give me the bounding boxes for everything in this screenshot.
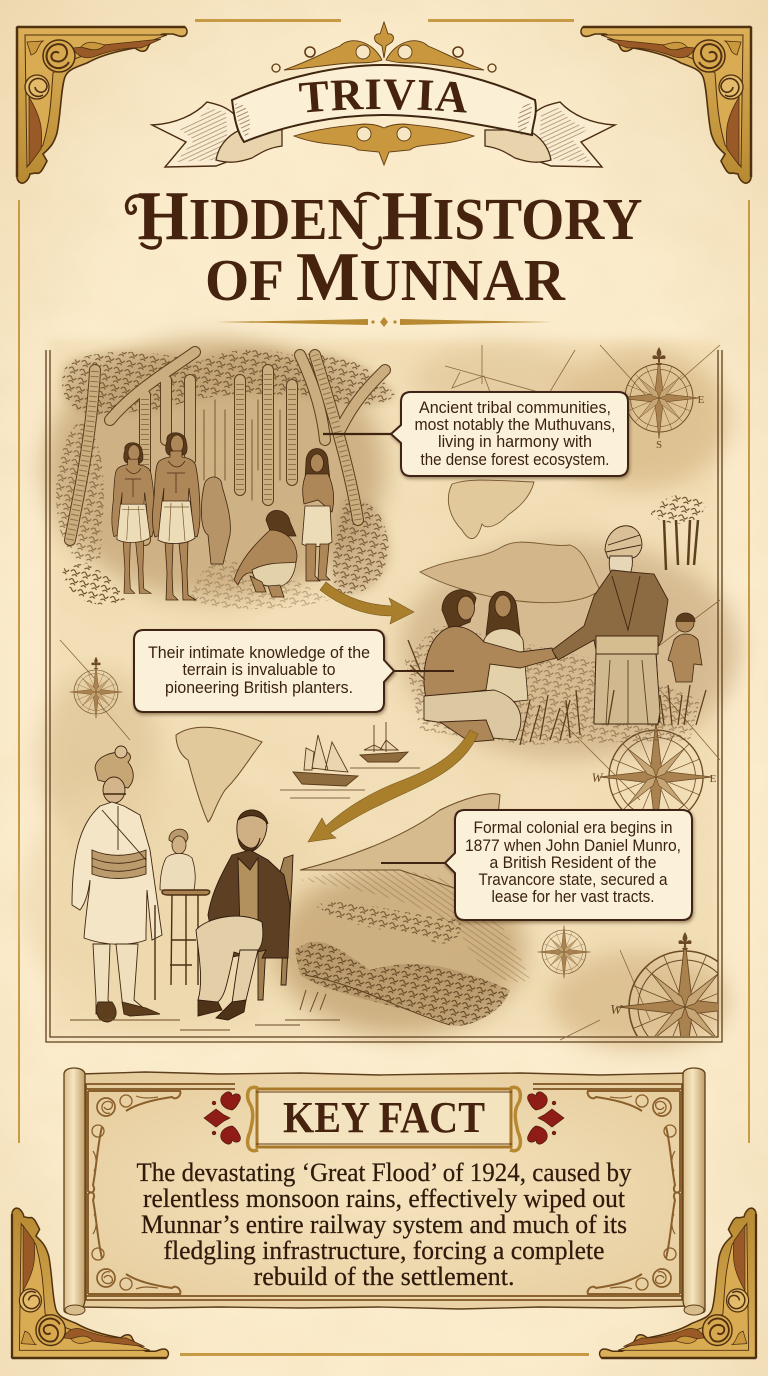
map of india bbox=[176, 727, 262, 822]
forest tree trunks bbox=[70, 352, 385, 540]
map lines bbox=[60, 345, 720, 1040]
side table bbox=[155, 890, 210, 1000]
title divider bbox=[216, 317, 552, 327]
corner ornament: top right bbox=[581, 27, 751, 183]
hooded figure bbox=[201, 477, 230, 564]
right scroll roll bbox=[683, 1068, 705, 1315]
map of north america bbox=[448, 480, 534, 539]
hills and forest backdrop bbox=[405, 495, 706, 745]
callout: terrain knowledge: terrain is invaluable to bbox=[182, 660, 336, 679]
ornament above ribbon bbox=[272, 22, 496, 72]
arrow: forest to handshake bbox=[320, 582, 414, 624]
callout: tribal communities: Ancient tribal communities, bbox=[419, 398, 611, 417]
tribal man centre bbox=[153, 433, 200, 600]
key fact body text: relentless monsoon rains, effectively wiped out bbox=[143, 1183, 626, 1213]
compass large south east bbox=[611, 932, 718, 1036]
tribal man left bbox=[112, 443, 155, 593]
sailing ships bbox=[280, 722, 420, 798]
compass west bbox=[70, 657, 122, 718]
panel frame bbox=[46, 350, 722, 1042]
foreground grass bbox=[408, 640, 706, 745]
forest foliage bbox=[56, 350, 395, 609]
crouching figure bbox=[234, 510, 297, 597]
compass north east: E bbox=[698, 394, 705, 406]
callout: colonial era: Formal colonial era begins in bbox=[474, 818, 672, 837]
compass east: E bbox=[710, 773, 717, 785]
title line two: OF MUNNAR bbox=[205, 239, 566, 316]
hillside landscape bbox=[295, 794, 530, 1026]
callout: colonial era: a British Resident of the bbox=[490, 853, 656, 872]
standing woman bbox=[302, 448, 334, 581]
key fact body text: Munnar’s entire railway system and much of its bbox=[141, 1209, 627, 1239]
seated gentleman bbox=[196, 810, 293, 1020]
title swashes bbox=[127, 194, 380, 248]
key fact scroll panel bbox=[64, 1068, 705, 1315]
panel parchment wash bbox=[20, 340, 740, 1050]
ground texture bbox=[70, 990, 340, 1030]
callout: terrain knowledge: pioneering British planters. bbox=[165, 678, 353, 697]
attendant bbox=[160, 829, 195, 890]
scroll inner corners bbox=[88, 1091, 680, 1294]
key fact heading box: KEY FACT bbox=[283, 1093, 485, 1142]
key fact body text: The devastating ‘Great Flood’ of 1924, caused by bbox=[136, 1157, 632, 1187]
ribbon left tail bbox=[152, 102, 240, 167]
compass north east: S bbox=[656, 439, 662, 451]
key fact body text: rebuild of the settlement. bbox=[254, 1261, 514, 1291]
callout: tribal communities: the dense forest ecosystem. bbox=[420, 450, 610, 469]
forest scene bbox=[56, 350, 395, 609]
compass east: N bbox=[651, 714, 662, 729]
trivia ribbon banner: TRIVIA bbox=[298, 79, 467, 113]
trivia ribbon banner bbox=[149, 20, 618, 168]
callout: terrain knowledge: Their intimate knowledge of the bbox=[148, 643, 370, 662]
callout: tribal communities: most notably the Muthuvans, bbox=[414, 415, 616, 434]
title line one: HIDDEN HISTORY bbox=[138, 178, 642, 255]
compass north east bbox=[618, 347, 705, 451]
colonial scene bbox=[70, 746, 530, 1030]
seated woman bbox=[482, 591, 528, 705]
callout: terrain knowledge bbox=[134, 630, 454, 712]
key fact heading box bbox=[248, 1087, 520, 1151]
compass large south east: W bbox=[610, 1003, 623, 1018]
corner ornament: top left bbox=[17, 27, 187, 183]
ornament below ribbon bbox=[294, 124, 474, 165]
callout: tribal communities: living in harmony with bbox=[438, 432, 592, 451]
man in turban standing bbox=[72, 746, 162, 1022]
ribbon right tail bbox=[527, 102, 615, 167]
man in turban shaking hands bbox=[552, 526, 668, 724]
arrow: handshake to colonial era bbox=[308, 730, 478, 842]
red flourish right bbox=[528, 1092, 564, 1144]
child bbox=[668, 613, 702, 682]
callout: colonial era: 1877 when John Daniel Munro, bbox=[465, 836, 681, 855]
key fact body text bbox=[136, 1157, 632, 1291]
corner ornament: bottom left bbox=[12, 1208, 168, 1358]
key fact body text: fledgling infrastructure, forcing a complete bbox=[164, 1235, 604, 1265]
corner ornament: bottom right bbox=[600, 1208, 756, 1358]
main title bbox=[127, 178, 642, 316]
callout: colonial era bbox=[381, 810, 692, 920]
ribbon title bbox=[290, 109, 478, 114]
left scroll roll bbox=[64, 1068, 85, 1315]
ribbon main band bbox=[232, 65, 536, 142]
callout: tribal communities bbox=[323, 392, 628, 476]
callout: colonial era: Travancore state, secured a bbox=[478, 870, 668, 889]
seated man shaking hands bbox=[424, 590, 556, 742]
red flourish left bbox=[204, 1092, 240, 1144]
illustrated map panel bbox=[20, 340, 752, 1074]
ribbon folds bbox=[216, 130, 282, 162]
callout: colonial era: lease for her vast tracts. bbox=[492, 887, 654, 906]
handshake scene bbox=[405, 495, 706, 745]
scroll parchment sheet bbox=[80, 1072, 690, 1309]
compass east bbox=[592, 714, 717, 833]
compass small south bbox=[538, 926, 590, 978]
scroll inner frame bbox=[85, 1084, 683, 1300]
compass east: W bbox=[592, 770, 604, 785]
